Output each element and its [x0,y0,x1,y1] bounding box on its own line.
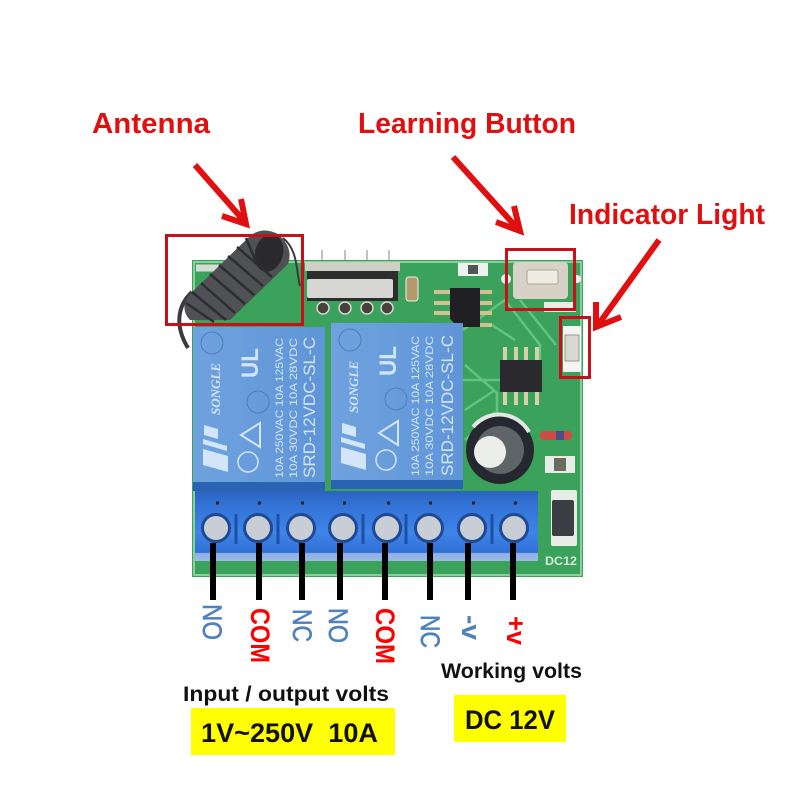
relay 1: SRD-12VDC-SL-C [300,337,319,478]
terminal labels: NC [287,609,317,642]
terminal labels: +v [501,616,531,645]
terminal labels: -v [456,615,486,640]
heading: Learning Button: Learning Button [358,108,576,140]
resistor [545,456,575,473]
highlight box: learning button [506,250,574,310]
chip: lower IC [500,347,542,405]
relay 2: 10A 30VDC 10A 28VDC [424,336,436,476]
indicator LED [563,326,581,372]
arrow: antenna [195,165,246,224]
diode [540,431,572,440]
arrow: indicator light [596,240,659,327]
arrow: learning button [453,157,520,231]
relay 1: 10A 30VDC 10A 28VDC [288,338,300,478]
crystal oscillator [305,250,400,314]
terminal screws [202,514,528,542]
silkscreen label: DC12 [545,554,577,568]
relay 2 [331,323,463,489]
highlight box: indicator light [560,318,590,378]
heading: Indicator Light: Indicator Light [569,199,765,231]
small SMD parts [406,263,576,312]
highlight box: antenna [166,236,302,324]
heading: Antenna: Antenna [92,108,211,140]
value box: 1V~250V 10A: 1V~250V 10A [201,718,378,748]
learning button [501,262,581,299]
connector lines [213,543,513,600]
capacitor [466,415,534,484]
power diode [551,490,577,546]
value box: 1V~250V 10A [191,708,395,755]
terminal labels: NC [415,615,445,648]
relay 2: SONGLE [346,361,361,413]
relay 1: 10A 250VAC 10A 125VAC [274,338,286,478]
terminal block [195,491,538,561]
terminal labels: COM [245,608,275,663]
terminal labels: NO [323,608,353,643]
value box: DC 12V: DC 12V [465,705,555,735]
chip: upper IC [434,288,492,327]
relay 1: UL [237,348,264,378]
antenna coil [179,230,300,348]
terminal labels: COM [370,608,400,664]
value box: DC 12V [454,695,566,742]
relay 2: SRD-12VDC-SL-C [438,335,457,476]
caption: input output volts: Input / output volts [183,683,389,706]
relay 2: UL [375,346,402,376]
terminal labels [197,604,531,664]
panel: circuit board [192,250,583,577]
relay 1 [193,327,325,491]
caption: working volts: Working volts [441,660,582,683]
relay 2: 10A 250VAC 10A 125VAC [410,336,422,476]
relay 1: SONGLE [208,363,223,415]
terminal labels: NO [197,604,227,640]
